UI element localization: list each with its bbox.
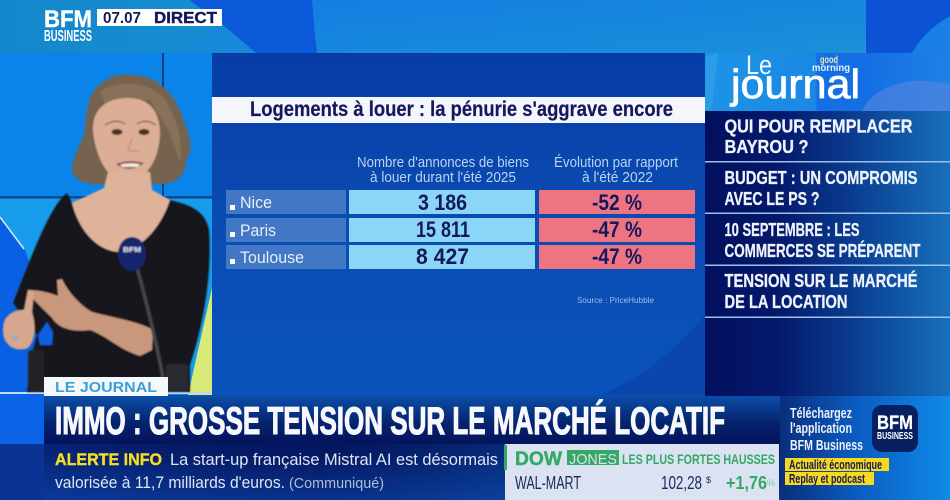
topic list: AVEC LE PS ? [724, 189, 820, 209]
stock panel: Dow Jones: $ [706, 475, 711, 485]
row: Toulouse: -47 % [592, 244, 642, 269]
journal header: morning [812, 63, 850, 74]
label: actualité économique: Actualité économique [789, 458, 882, 472]
stock panel: Dow Jones: % [767, 478, 775, 488]
logo: BFM Business [44, 6, 92, 45]
microphone [118, 237, 146, 271]
app promo: BFM Business [790, 437, 863, 454]
topic list: 10 SEPTEMBRE : LES [724, 220, 860, 240]
row: Nice: 3 186 [418, 190, 467, 215]
row: Nice [226, 190, 695, 215]
logo: BFM Business: BFM [44, 6, 92, 33]
stock panel: Dow Jones: +1,76 [726, 473, 767, 493]
journal header: journal [730, 61, 860, 107]
table column headers: Nombre d'annonces de biens [357, 155, 529, 171]
microphone stand [137, 268, 163, 378]
stock panel: Dow Jones: LES PLUS FORTES HAUSSES [622, 451, 775, 467]
presenter [3, 75, 210, 392]
table column headers: à louer durant l'été 2025 [370, 170, 516, 186]
news ticker [55, 450, 498, 492]
journal header [705, 50, 950, 111]
stock panel: Dow Jones: JONES [569, 451, 617, 468]
topic list: DE LA LOCATION [724, 292, 848, 312]
journal header: good [820, 55, 838, 66]
stock panel: Dow Jones [504, 444, 779, 500]
topic list: QUI POUR REMPLACER [724, 116, 912, 136]
logo: BFM Business: BUSINESS [44, 28, 92, 45]
row: Paris: Paris [240, 221, 276, 240]
studio background [0, 53, 212, 395]
microphone: BFM [123, 247, 141, 254]
stock panel: Dow Jones: DOW [515, 449, 562, 470]
time and live label: 07.07 [103, 10, 141, 27]
stock panel: Dow Jones: WAL-MART [515, 473, 581, 493]
row: Paris [226, 217, 695, 242]
black top [13, 193, 210, 392]
source: Source : PriceHubble [577, 295, 654, 305]
chair [28, 350, 44, 392]
face and neck [93, 98, 160, 182]
lower third [0, 377, 950, 500]
news ticker: valorisée à 11,7 milliards d'euros. [55, 473, 285, 492]
label: replay et podcast: Replay et podcast [789, 472, 866, 486]
right panel: le journal [705, 50, 950, 396]
hands and forearm [28, 279, 153, 356]
row: Nice: Nice [240, 193, 272, 212]
icon: BFM Business app: BUSINESS [877, 431, 913, 442]
central panel [212, 53, 705, 395]
eyes, mouth [112, 129, 122, 135]
row: Toulouse: 8 427 [416, 244, 469, 269]
row: Paris: -47 % [592, 217, 642, 242]
chart title: Logements à louer : la pénurie s'aggrave encore [250, 98, 673, 121]
row: Toulouse [226, 244, 695, 269]
stock panel: Dow Jones: 102,28 [661, 473, 702, 493]
news ticker: La start-up française Mistral AI est désormais [170, 450, 498, 469]
row: Nice: -52 % [592, 190, 642, 215]
table column headers: Évolution par rapport [554, 154, 678, 171]
journal header: Le [746, 50, 772, 80]
time and live label: DIRECT [154, 10, 218, 27]
table column headers: à l'été 2022 [582, 170, 653, 186]
tag: le journal [44, 377, 168, 396]
time and live label [97, 9, 222, 27]
icon: BFM Business app [872, 405, 918, 452]
hair [72, 75, 190, 184]
table column headers [357, 154, 678, 186]
tag: le journal: LE JOURNAL [55, 380, 157, 396]
app promo: Téléchargez [790, 405, 852, 422]
app promo: l'application [790, 420, 852, 437]
icon: BFM Business app: BFM [877, 413, 913, 434]
news ticker: ALERTE INFO [55, 450, 162, 469]
row: Paris: 15 811 [416, 217, 470, 242]
row: Toulouse: Toulouse [240, 248, 304, 267]
topic list [705, 111, 950, 396]
topic list: BAYROU ? [724, 137, 808, 157]
top banner [0, 0, 950, 53]
app promo [780, 396, 950, 500]
news ticker: (Communiqué) [289, 475, 384, 492]
